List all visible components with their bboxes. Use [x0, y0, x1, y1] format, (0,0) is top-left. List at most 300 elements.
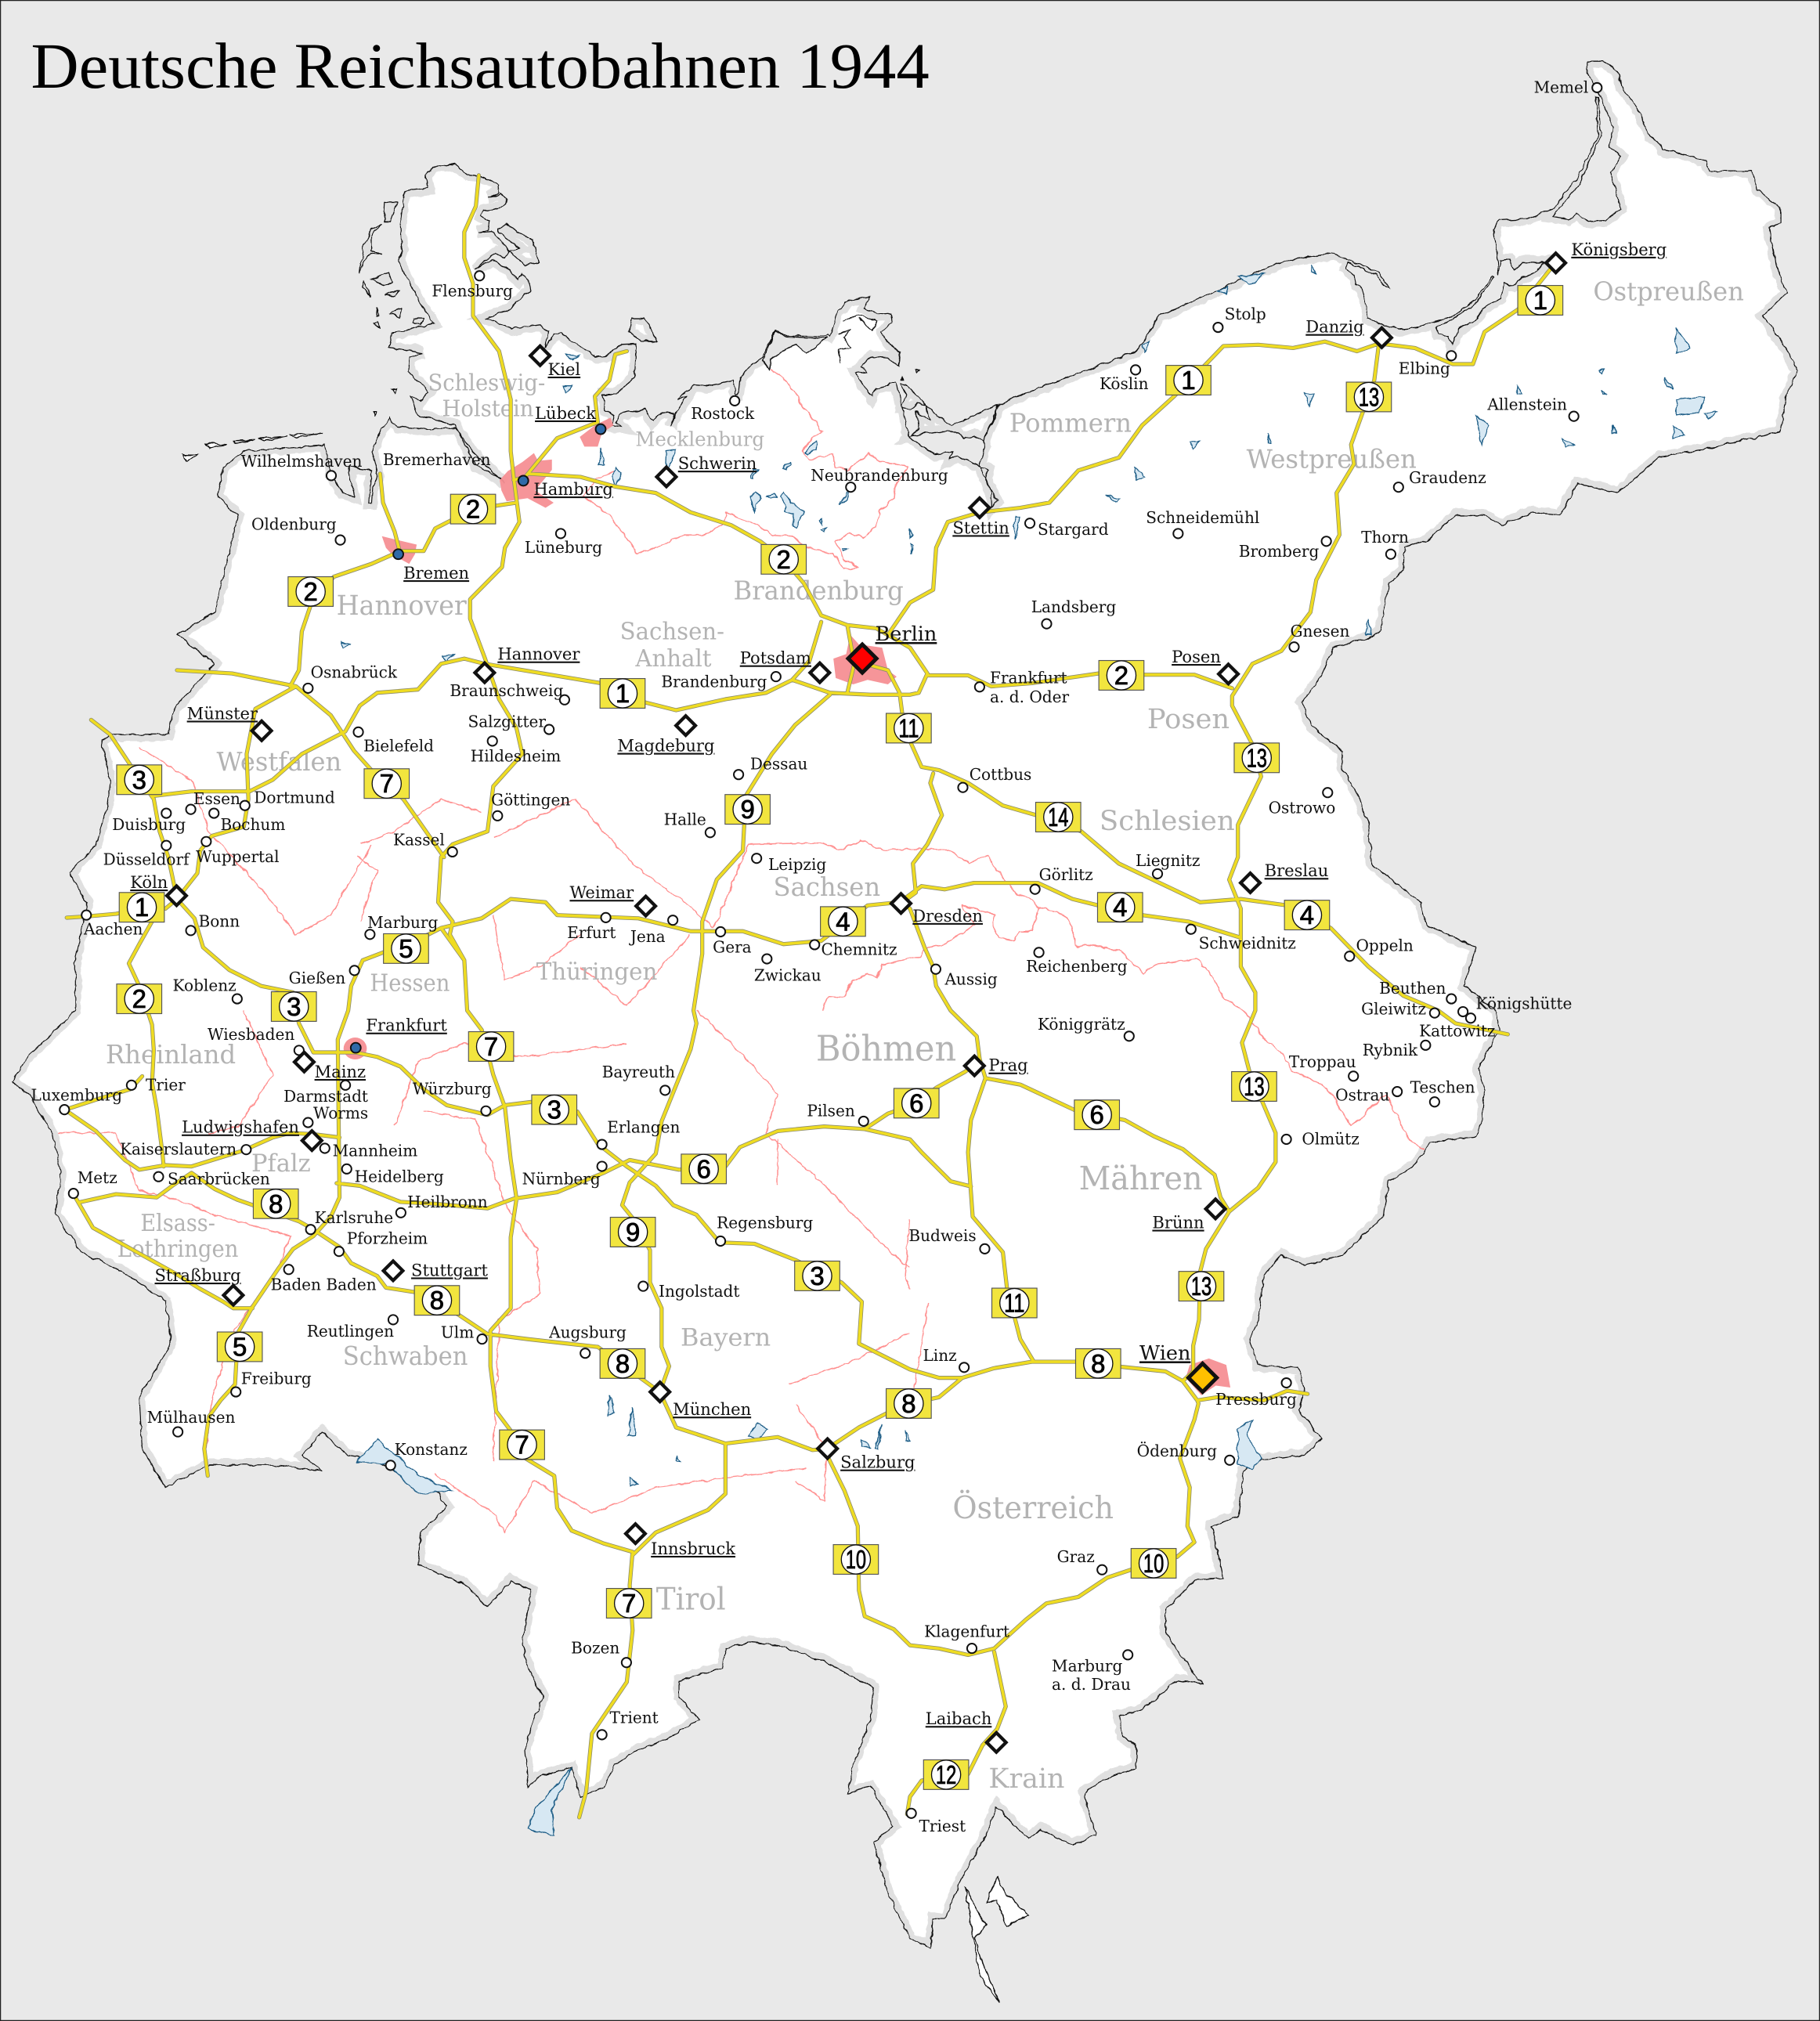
city: Allenstein: Allenstein: [1486, 395, 1567, 413]
city: Trier: [127, 1075, 186, 1094]
autobahn network: [65, 175, 1555, 1817]
city: Baden Baden: Baden Baden: [271, 1276, 377, 1294]
shield: route 1: 1: [1181, 366, 1196, 395]
shield: route 4: [1284, 900, 1330, 930]
city: Teschen: [1410, 1078, 1475, 1106]
city: Ludwigshafen: [182, 1117, 322, 1150]
region names: Thüringen: [536, 958, 657, 985]
city: Baden Baden: [271, 1265, 377, 1294]
city: Berlin: Berlin: [876, 623, 937, 646]
region names: Tirol: [656, 1582, 726, 1618]
city: Stargard: Stargard: [1038, 520, 1109, 539]
shield: route 6: 6: [909, 1088, 923, 1117]
area: Berlin: [833, 635, 897, 684]
city: Marburg: Marburg: [367, 913, 439, 932]
city: Pilsen: Pilsen: [807, 1101, 855, 1120]
region names: Schwaben: [343, 1341, 468, 1371]
city: Düsseldorf: [103, 841, 190, 868]
city: Würzburg: [413, 1079, 492, 1116]
city: Heilbronn: [396, 1193, 488, 1218]
shield: route 2: [117, 984, 162, 1014]
city: Braunschweig: Braunschweig: [450, 681, 563, 700]
shield: route 8: [414, 1286, 460, 1315]
shield: route 3: [271, 992, 316, 1021]
city: Brandenburg: Brandenburg: [661, 672, 767, 691]
city: Oppeln: Oppeln: [1356, 937, 1414, 955]
region names: Posen: [1147, 704, 1230, 735]
region names: Sachsen: [774, 872, 880, 902]
city: Koblenz: Koblenz: [173, 976, 237, 995]
city: Königshütte: Königshütte: [1476, 994, 1572, 1013]
city: Düsseldorf: Düsseldorf: [103, 850, 190, 868]
city: Lüneburg: [525, 529, 602, 557]
shield: route 2: [288, 577, 333, 606]
city: Trier: Trier: [146, 1075, 186, 1094]
city: Dresden: [891, 893, 983, 926]
city: Hamburg: Hamburg: [533, 479, 613, 499]
shield: route 6: [681, 1154, 726, 1184]
city: Gnesen: Gnesen: [1291, 622, 1350, 641]
city: Oldenburg: Oldenburg: [251, 514, 337, 533]
shield: route 8: 8: [269, 1189, 283, 1218]
area: Lübeck: [580, 417, 613, 446]
region names: Böhmen: [816, 1030, 956, 1070]
city: Mainz: [294, 1052, 366, 1081]
city: Hildesheim: Hildesheim: [471, 747, 561, 766]
city: Salzburg: [818, 1439, 915, 1472]
city: Schweidnitz: [1186, 925, 1296, 952]
city: Aachen: Aachen: [83, 919, 143, 938]
shield: route 1: [600, 679, 645, 708]
area: Wien: [1186, 1359, 1230, 1395]
city: Marburg a. d. Drau: [1052, 1650, 1132, 1694]
region names: Anhalt: [634, 645, 712, 672]
shield: route 4: 4: [1113, 893, 1127, 922]
city: Berlin: [848, 623, 937, 673]
shield: route 8: 8: [1091, 1349, 1105, 1378]
shield: route 10: [1131, 1549, 1176, 1578]
city: Allenstein: [1486, 395, 1579, 421]
city: Kattowitz: Kattowitz: [1419, 1021, 1496, 1040]
city: Rostock: [691, 396, 755, 423]
city: Potsdam: [740, 648, 829, 683]
shield: route 11: 11: [1004, 1289, 1024, 1318]
shield: route 5: [384, 933, 428, 963]
city: Magdeburg: [617, 716, 714, 756]
city: Heilbronn: Heilbronn: [407, 1193, 488, 1211]
shield: route 9: [610, 1218, 655, 1247]
city: Königgrätz: Königgrätz: [1038, 1015, 1125, 1034]
city: Stettin: Stettin: [952, 518, 1009, 537]
city: Schweidnitz: Schweidnitz: [1199, 933, 1296, 952]
city: Dessau: Dessau: [750, 755, 807, 774]
region names: Pommern: [1009, 407, 1132, 438]
shield: route 8: [1076, 1348, 1121, 1378]
city: Nürnberg: Nürnberg: [522, 1170, 601, 1189]
shield: route 3: [795, 1261, 840, 1290]
shield: route 3: [532, 1095, 577, 1124]
area: Frankfurt: [344, 1038, 367, 1059]
shield: route 6: 6: [697, 1154, 711, 1183]
city: Ulm: Ulm: [441, 1323, 474, 1341]
city: München: München: [673, 1399, 751, 1419]
state borders: [58, 370, 1424, 1532]
city: Erlangen: [598, 1118, 680, 1149]
city: Neubrandenburg: Neubrandenburg: [811, 466, 948, 485]
shield: route 2: 2: [304, 577, 318, 606]
city: Pressburg: Pressburg: [1215, 1390, 1297, 1409]
city: Erfurt: Erfurt: [567, 923, 616, 942]
shield: route 13: [1232, 1072, 1277, 1101]
area: Bremen: [382, 536, 417, 564]
shield: route 14: 14: [1048, 803, 1068, 832]
city: Wuppertal: [196, 837, 280, 866]
city: Trient: Trient: [610, 1709, 659, 1727]
city: Essen: Essen: [193, 789, 240, 808]
city: Klagenfurt: [924, 1622, 1009, 1653]
city: Köln: Köln: [130, 872, 168, 892]
shield: route 2: 2: [777, 545, 791, 574]
city: Worms: Worms: [313, 1104, 368, 1123]
shield: route 2: [450, 494, 496, 524]
city: Breslau: Breslau: [1265, 861, 1328, 880]
shield: route 2: 2: [132, 984, 146, 1013]
city: Wiesbaden: [208, 1025, 304, 1055]
city: Kiel: Kiel: [548, 359, 580, 379]
metropolitan areas: [344, 417, 1230, 1395]
city: Weimar: [569, 882, 655, 915]
shield: route 4: 4: [836, 907, 850, 936]
city: Königsberg: [1546, 240, 1667, 272]
region names: Schleswig-: [428, 370, 545, 396]
city: Gleiwitz: Gleiwitz: [1361, 999, 1426, 1018]
shield: route 13: 13: [1247, 743, 1267, 772]
shield: route 1: [1518, 286, 1563, 315]
city: Memel: Memel: [1534, 78, 1588, 97]
city: Gera: Gera: [713, 937, 752, 956]
city: Beuthen: Beuthen: [1379, 979, 1446, 998]
city: Hannover: [475, 644, 580, 683]
shield: route 9: 9: [626, 1218, 640, 1247]
city: Schneidemühl: [1146, 508, 1259, 538]
region names: [106, 276, 1744, 1795]
city: Metz: Metz: [78, 1168, 117, 1187]
city: Stolp: [1213, 305, 1266, 332]
city: Halle: [664, 810, 715, 837]
shield: route 7: 7: [515, 1431, 529, 1460]
city: Wien: Wien: [1139, 1341, 1190, 1365]
shield: route 3: 3: [287, 992, 301, 1021]
shield: route 3: 3: [810, 1261, 825, 1290]
city: Karlsruhe: Karlsruhe: [315, 1208, 393, 1227]
shield: route 9: [725, 795, 770, 825]
shield: route 8: 8: [430, 1286, 444, 1315]
city: Trient: [598, 1709, 659, 1739]
city: Wuppertal: Wuppertal: [196, 847, 280, 866]
shield: route 7: [468, 1032, 514, 1061]
city: Laibach: [926, 1709, 1006, 1752]
city: Osnabrück: Osnabrück: [311, 663, 398, 682]
city: Innsbruck: [626, 1524, 735, 1558]
city: Regensburg: [716, 1214, 813, 1246]
city: Hildesheim: [471, 736, 561, 766]
city: Augsburg: [548, 1323, 627, 1358]
shield: route 13: [1179, 1272, 1224, 1301]
city: Bochum: Bochum: [220, 815, 285, 834]
city: Ludwigshafen: Ludwigshafen: [182, 1117, 299, 1137]
region names: Österreich: [952, 1489, 1114, 1526]
city: Aussig: [931, 965, 998, 988]
city: Brünn: Brünn: [1152, 1213, 1204, 1232]
city: Wiesbaden: Wiesbaden: [208, 1025, 294, 1044]
region names: Sachsen-: [620, 618, 724, 644]
city: Marburg: [365, 913, 439, 939]
city: Halle: Halle: [664, 810, 706, 828]
city: Essen: [186, 789, 240, 814]
city: Wilhelmshaven: [241, 452, 363, 480]
city: Dresden: Dresden: [912, 906, 983, 926]
city: Nürnberg: [522, 1161, 607, 1189]
city: Graudenz: [1394, 468, 1486, 492]
city: Ödenburg: Ödenburg: [1137, 1441, 1217, 1460]
city: Köslin: Köslin: [1100, 374, 1149, 393]
city: Konstanz: [386, 1440, 468, 1470]
shield: route 4: [1097, 893, 1143, 922]
city: Kaiserslautern: Kaiserslautern: [120, 1140, 237, 1159]
region names: Mecklenburg: [635, 428, 764, 451]
city: Triest: [907, 1809, 966, 1835]
shield: route 1: 1: [135, 893, 149, 922]
city: Wilhelmshaven: Wilhelmshaven: [241, 452, 363, 471]
city: Kassel: [393, 831, 457, 857]
city: Pilsen: [807, 1101, 868, 1126]
city: Regensburg: Regensburg: [717, 1214, 813, 1232]
city: Köln: [130, 872, 186, 905]
city: Stuttgart: Stuttgart: [411, 1260, 488, 1279]
city: Flensburg: Flensburg: [432, 282, 513, 301]
city: Münster: Münster: [187, 703, 258, 723]
city: Breslau: [1240, 861, 1328, 893]
city: Stettin: [952, 498, 1009, 537]
city: Potsdam: Potsdam: [740, 648, 811, 668]
city: Luxemburg: [31, 1086, 122, 1114]
shield: route 13: [1234, 743, 1280, 773]
city: Bromberg: [1239, 536, 1331, 561]
shield: route 7: 7: [622, 1589, 636, 1618]
shield: route 8: [600, 1348, 645, 1378]
shield: route 1: [119, 893, 164, 922]
shield: route 7: [364, 769, 410, 799]
shield: route 5: 5: [233, 1332, 247, 1361]
city: Würzburg: Würzburg: [413, 1079, 492, 1098]
city: Freiburg: Freiburg: [241, 1370, 312, 1388]
city: Cottbus: Cottbus: [970, 765, 1031, 784]
shield: route 7: [606, 1589, 652, 1618]
city: Zwickau: Zwickau: [754, 966, 822, 985]
city: Görlitz: [1031, 865, 1093, 894]
title: Deutsche Reichsautobahnen 1944: [31, 31, 930, 102]
cities and labels: [31, 78, 1667, 1835]
city: Innsbruck: Innsbruck: [651, 1539, 735, 1558]
city: Budweis: Budweis: [908, 1226, 977, 1245]
region names: Ostpreußen: [1593, 276, 1744, 306]
city: Pforzheim: Pforzheim: [347, 1229, 428, 1247]
shield: route 2: [761, 544, 807, 574]
city: Karlsruhe: [306, 1208, 393, 1234]
shield: route 6: [894, 1088, 939, 1118]
city: Magdeburg: Magdeburg: [617, 736, 714, 756]
city: Jena: Jena: [629, 927, 666, 946]
city: Königgrätz: [1038, 1015, 1134, 1041]
city: Heidelberg: Heidelberg: [355, 1167, 444, 1186]
shield: route 8: 8: [901, 1389, 916, 1418]
city: Saarbrücken: Saarbrücken: [168, 1170, 270, 1189]
city: Oldenburg: [251, 514, 345, 545]
city: Bremen: [393, 549, 469, 583]
city: Bielefeld: [353, 727, 434, 756]
shield: route 3: 3: [547, 1095, 562, 1124]
city: München: [650, 1382, 751, 1419]
city: Reutlingen: Reutlingen: [307, 1322, 394, 1341]
city: Ödenburg: [1137, 1441, 1234, 1465]
shield: route 11: 11: [898, 713, 919, 742]
city: Frankfurt: Frankfurt: [366, 1016, 447, 1035]
city: Konstanz: Konstanz: [395, 1440, 468, 1459]
city: Salzburg: Salzburg: [840, 1453, 915, 1472]
city: Bremerhaven: Bremerhaven: [383, 450, 491, 469]
city: Danzig: Danzig: [1305, 317, 1364, 337]
shield: route 7: 7: [484, 1032, 498, 1061]
city: Bayreuth: Bayreuth: [602, 1063, 675, 1081]
city: Graz: Graz: [1057, 1547, 1095, 1566]
city: Linz: Linz: [923, 1346, 957, 1365]
city: Aussig: Aussig: [944, 969, 998, 988]
city: Pressburg: [1215, 1378, 1297, 1409]
city: Erlangen: Erlangen: [607, 1118, 680, 1137]
city: Olmütz: Olmütz: [1302, 1130, 1360, 1149]
city: Lübeck: [535, 403, 605, 435]
city: Bielefeld: Bielefeld: [363, 737, 434, 756]
city: Ingolstadt: Ingolstadt: [659, 1282, 739, 1301]
city: Mülhausen: Mülhausen: [147, 1408, 235, 1427]
region names: Brandenburg: [734, 575, 904, 605]
shield: route 8: [887, 1388, 931, 1418]
shield: route 3: [117, 765, 162, 795]
region names: Holstein: [442, 395, 533, 422]
city: Bromberg: Bromberg: [1239, 542, 1319, 561]
city: Weimar: Weimar: [569, 882, 634, 902]
city: Linz: [923, 1346, 969, 1372]
city: Mülhausen: [147, 1408, 235, 1437]
shield: route 2: 2: [466, 495, 480, 524]
shield: route 1: 1: [616, 679, 630, 708]
city: Prag: Prag: [988, 1056, 1028, 1075]
shield: route 13: [1346, 382, 1392, 412]
shield: route 13: 13: [1191, 1272, 1212, 1301]
region names: Schlesien: [1100, 806, 1235, 837]
city: Aachen: [81, 910, 143, 938]
city: Mainz: Mainz: [315, 1062, 366, 1081]
shield: route 1: [1166, 366, 1211, 395]
city: Brünn: [1152, 1200, 1225, 1232]
city: Stolp: Stolp: [1225, 305, 1266, 323]
shield: route 2: [1099, 661, 1144, 690]
lakes: [341, 264, 1717, 1835]
city: Göttingen: Göttingen: [491, 791, 570, 810]
inner lagoon at Darss: [763, 331, 828, 370]
shield: route 4: 4: [1300, 900, 1314, 929]
city: Mannheim: Mannheim: [333, 1141, 417, 1160]
city: Elbing: [1399, 351, 1456, 377]
city: Teschen: Teschen: [1410, 1078, 1475, 1097]
city: Kiel: [530, 346, 580, 379]
region names: Hannover: [337, 590, 467, 622]
city: Köslin: [1100, 365, 1149, 393]
region names: Mähren: [1079, 1160, 1203, 1197]
city: Frankfurt a. d. Oder: [975, 668, 1070, 706]
region names: Krain: [988, 1763, 1065, 1795]
city: Landsberg: [1031, 597, 1116, 629]
shield: route 10: 10: [846, 1545, 866, 1574]
city: Osnabrück: [303, 663, 398, 693]
city: Laibach: Laibach: [926, 1709, 991, 1728]
city: Bozen: Bozen: [571, 1639, 619, 1658]
region names: Pfalz: [251, 1149, 311, 1178]
city: Freiburg: [231, 1370, 312, 1397]
shield: route 8: [253, 1189, 298, 1218]
city: Straßburg: Straßburg: [155, 1265, 241, 1285]
city: Liegnitz: Liegnitz: [1136, 851, 1200, 870]
region names: Lothringen: [117, 1236, 238, 1262]
city: Troppau: [1289, 1052, 1358, 1081]
city: Cottbus: [958, 765, 1031, 792]
city: Koblenz: [173, 976, 242, 1004]
city: Königsberg: Königsberg: [1571, 240, 1667, 259]
city: Ostrowo: [1269, 788, 1335, 817]
city: Bochum: [209, 808, 285, 834]
city: Metz: [69, 1168, 117, 1198]
city: Ulm: [441, 1323, 487, 1344]
city: Elbing: Elbing: [1399, 359, 1450, 377]
city: Augsburg: Augsburg: [548, 1323, 627, 1341]
shield: route 12: [923, 1759, 969, 1789]
city: Prag: [965, 1056, 1028, 1076]
city: Schneidemühl: Schneidemühl: [1146, 508, 1259, 527]
city: Ostrau: Ostrau: [1335, 1086, 1390, 1105]
city: Gnesen: [1289, 622, 1350, 651]
region names: Hessen: [370, 970, 450, 997]
shield: route 12: 12: [936, 1760, 956, 1789]
city: Graudenz: Graudenz: [1409, 468, 1486, 487]
city: Salzgitter: Salzgitter: [468, 712, 546, 731]
area: Hamburg: [500, 453, 554, 508]
city: Luxemburg: Luxemburg: [31, 1086, 122, 1105]
shield: route 6: [1074, 1100, 1119, 1130]
city: Straßburg: [155, 1265, 243, 1305]
city: Darmstadt: Darmstadt: [283, 1087, 368, 1106]
city: Zwickau: [754, 954, 822, 985]
shield: route 10: 10: [1143, 1549, 1164, 1578]
shield: route 4: [821, 907, 865, 937]
city: Bremen: Bremen: [403, 563, 469, 583]
city: Pforzheim: [334, 1229, 428, 1256]
shield: route 14: [1035, 803, 1081, 832]
city: Ostrowo: Ostrowo: [1269, 799, 1335, 817]
city: Oppeln: [1345, 937, 1414, 961]
region names: Rheinland: [106, 1039, 236, 1070]
city: Landsberg: Landsberg: [1031, 597, 1116, 616]
region names: Elsass-: [140, 1210, 215, 1236]
